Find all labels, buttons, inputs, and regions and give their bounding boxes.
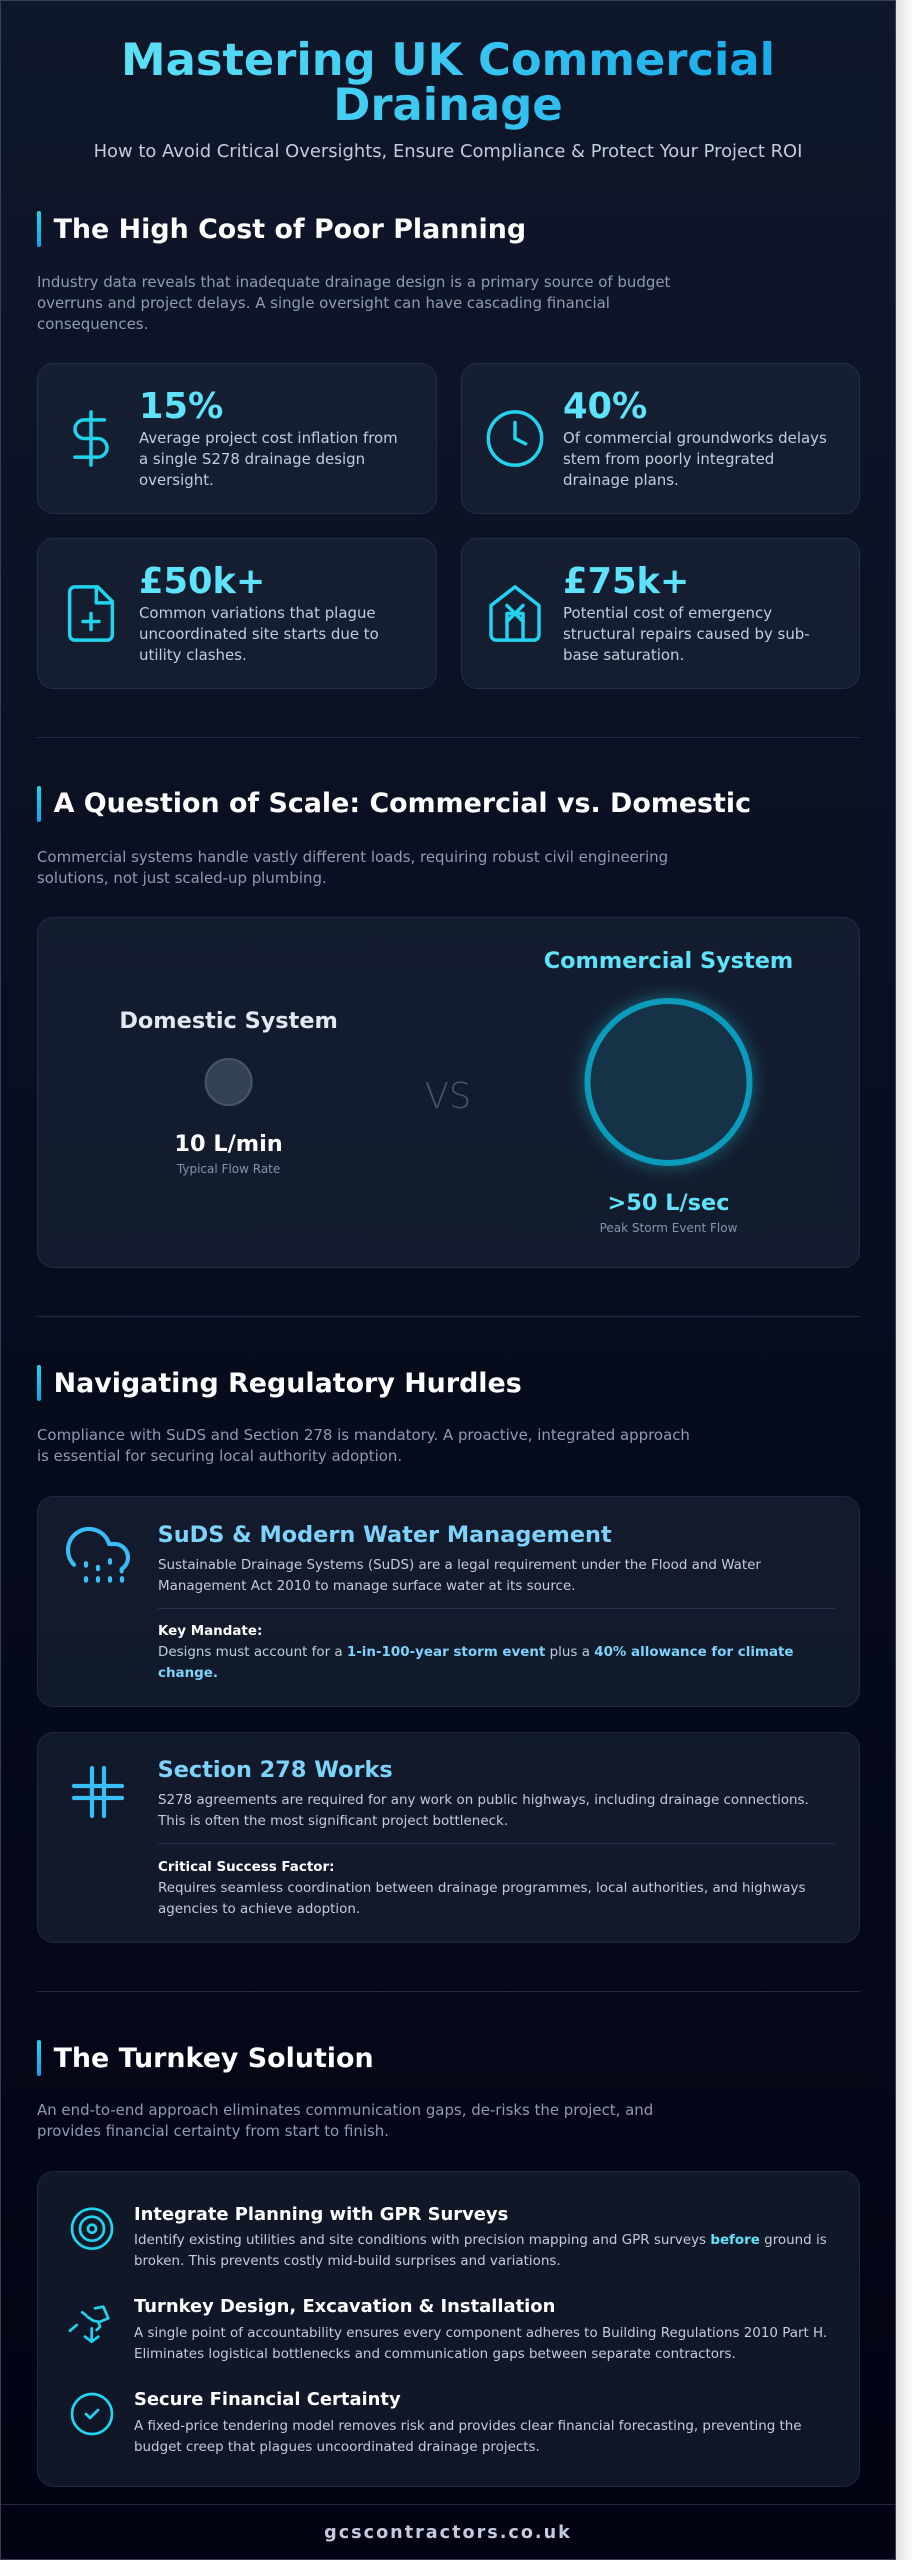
page shadow edge xyxy=(896,0,912,2560)
title: Drainage xyxy=(333,78,563,131)
domestic flow value: 10 L/min xyxy=(174,1131,283,1157)
title xyxy=(121,33,775,131)
stat description xyxy=(139,429,398,489)
stat description: structural repairs caused by sub- xyxy=(563,625,810,643)
stat description: Potential cost of emergency xyxy=(563,604,772,622)
section heading: A Question of Scale: A Question of Scale: Commercial vs. Domestic xyxy=(54,788,751,819)
title: Mastering UK Commercial xyxy=(121,33,775,86)
stat description: uncoordinated site starts due to xyxy=(139,625,379,643)
critical success factor xyxy=(158,1860,805,1917)
section heading: The Turnkey Solution: The Turnkey Solution xyxy=(54,2043,374,2074)
card body: This is often the most significant project bottleneck. xyxy=(157,1814,508,1829)
section heading: Navigating Regulatory Hurdles: Navigating Regulatory Hurdles xyxy=(54,1368,522,1399)
stat description: a single S278 drainage design xyxy=(139,450,365,468)
panel: turnkey steps xyxy=(38,2172,860,2486)
stat description xyxy=(563,604,810,664)
icon: target xyxy=(72,2209,112,2249)
critical success factor: agencies to achieve adoption. xyxy=(158,1902,360,1917)
icon: hash grid xyxy=(74,1768,122,1816)
stat value: 40% xyxy=(563,386,647,427)
section heading: The High Cost of Poor Planning: The High Cost of Poor Planning xyxy=(54,214,526,245)
icon: dollar sign xyxy=(75,412,107,465)
intro text: cost: consequences. xyxy=(37,315,148,333)
card heading: Section 278 Works xyxy=(158,1757,393,1783)
card body: S278 agreements are required for any work on public highways, including drainage connections. xyxy=(158,1793,809,1808)
commercial label: Commercial System xyxy=(544,948,793,974)
step 3: Secure Financial Certainty xyxy=(134,2389,401,2410)
step 1: Integrate Planning with GPR Surveys xyxy=(134,2204,508,2225)
subtitle: How to Avoid Critical Oversights, Ensure Compliance & Protect Your Project ROI xyxy=(94,141,802,162)
intro text: regulation xyxy=(37,1426,690,1465)
step 2: Eliminates logistical bottlenecks and communication gaps between separate contractors. xyxy=(134,2347,736,2362)
intro text: cost: overruns and project delays. A single oversight can have cascading financial xyxy=(37,294,610,312)
stat description: base saturation. xyxy=(563,646,684,664)
step 3: budget creep that plagues uncoordinated drainage projects. xyxy=(134,2440,540,2455)
domestic system column xyxy=(119,1008,338,1176)
icon: damaged house xyxy=(491,587,539,640)
card body: Management Act 2010 to manage surface water at its source. xyxy=(158,1579,575,1594)
intro text: regulation: is essential for securing local authority adoption. xyxy=(37,1447,402,1465)
domestic flow caption: Typical Flow Rate xyxy=(176,1162,280,1176)
intro text: turnkey: An end-to-end approach eliminates communication gaps, de-risks the project, and xyxy=(37,2101,653,2119)
step 2: Turnkey Design, Excavation & Installation xyxy=(134,2296,555,2317)
stat description: oversight. xyxy=(139,471,214,489)
panel: SuDS xyxy=(38,1496,860,1706)
card heading: SuDS & Modern Water Management xyxy=(158,1522,612,1548)
icon: file plus xyxy=(70,587,112,640)
versus label: VS xyxy=(425,1076,471,1117)
step 1: Identify existing utilities and site conditions with precision mapping and GPR surveys before ground is xyxy=(134,2233,827,2248)
stat description: Average project cost inflation from xyxy=(139,429,398,447)
critical success factor: Requires seamless coordination between drainage programmes, local authorities, and highways xyxy=(158,1881,805,1896)
intro text: turnkey xyxy=(37,2101,653,2140)
stat value: £75k+ xyxy=(563,561,689,602)
stat description xyxy=(139,604,379,664)
key mandate: Key Mandate: xyxy=(158,1624,262,1639)
intro text: scale: Commercial systems handle vastly different loads, requiring robust civil engineering xyxy=(37,848,668,866)
step 3: A fixed-price tendering model removes risk and provides clear financial forecasting, preventing the xyxy=(134,2419,802,2434)
stat description: drainage plans. xyxy=(563,471,679,489)
key mandate: change. xyxy=(158,1666,218,1681)
stat value: £50k+ xyxy=(139,561,265,602)
key mandate: Designs must account for a 1-in-100-year storm event plus a 40% allowance for climate xyxy=(158,1645,794,1660)
stat value: 15% xyxy=(139,386,223,427)
step 1: broken. This prevents costly mid-build surprises and variations. xyxy=(134,2254,561,2269)
stat description: Common variations that plague xyxy=(139,604,376,622)
step 2: A single point of accountability ensures every component adheres to Building Regulations 2010 Part H. xyxy=(134,2326,827,2341)
stat description: Of commercial groundworks delays xyxy=(563,429,827,447)
panel: stat £50k+ xyxy=(38,538,436,688)
key mandate xyxy=(158,1624,794,1681)
critical success factor: Critical Success Factor: xyxy=(158,1860,334,1875)
step 1 xyxy=(134,2204,827,2269)
commercial flow caption: Peak Storm Event Flow xyxy=(600,1221,738,1235)
intro text: scale xyxy=(37,848,668,887)
panel: stat 15% xyxy=(38,364,436,514)
domestic label: Domestic System xyxy=(119,1008,338,1034)
icon: rain cloud xyxy=(68,1529,128,1581)
commercial system column xyxy=(544,948,793,1235)
intro text: regulation: Compliance with SuDS and Section 278 is mandatory. A proactive, integrated approach xyxy=(37,1426,690,1444)
step 3 xyxy=(134,2389,802,2455)
icon: check circle xyxy=(72,2394,112,2434)
panel: scale comparison xyxy=(38,918,860,1268)
footer: gcscontractors.co.uk xyxy=(324,2523,572,2543)
panel: stat £75k+ xyxy=(462,538,860,688)
intro text: turnkey: provides financial certainty from start to finish. xyxy=(37,2122,389,2140)
icon: broken pipe arrow xyxy=(70,2307,108,2342)
card body xyxy=(157,1793,809,1829)
domestic pipe circle xyxy=(206,1059,252,1105)
footer xyxy=(1,2504,895,2559)
intro text: scale: solutions, not just scaled-up plumbing. xyxy=(37,869,327,887)
panel: Section 278 xyxy=(38,1732,860,1942)
stat description: stem from poorly integrated xyxy=(563,450,774,468)
intro text: cost: Industry data reveals that inadequate drainage design is a primary source of budget xyxy=(37,273,671,291)
icon: clock xyxy=(488,412,542,465)
commercial flow value: >50 L/sec xyxy=(608,1190,729,1216)
intro text: cost xyxy=(37,273,671,333)
commercial pipe glow xyxy=(584,998,752,1166)
card body: Sustainable Drainage Systems (SuDS) are a legal requirement under the Flood and Water xyxy=(158,1558,761,1573)
commercial pipe circle xyxy=(588,1001,750,1163)
stat description xyxy=(563,429,827,489)
card body xyxy=(158,1558,761,1594)
panel: stat 40% xyxy=(462,364,860,514)
stat description: utility clashes. xyxy=(139,646,247,664)
step 2 xyxy=(134,2296,827,2362)
